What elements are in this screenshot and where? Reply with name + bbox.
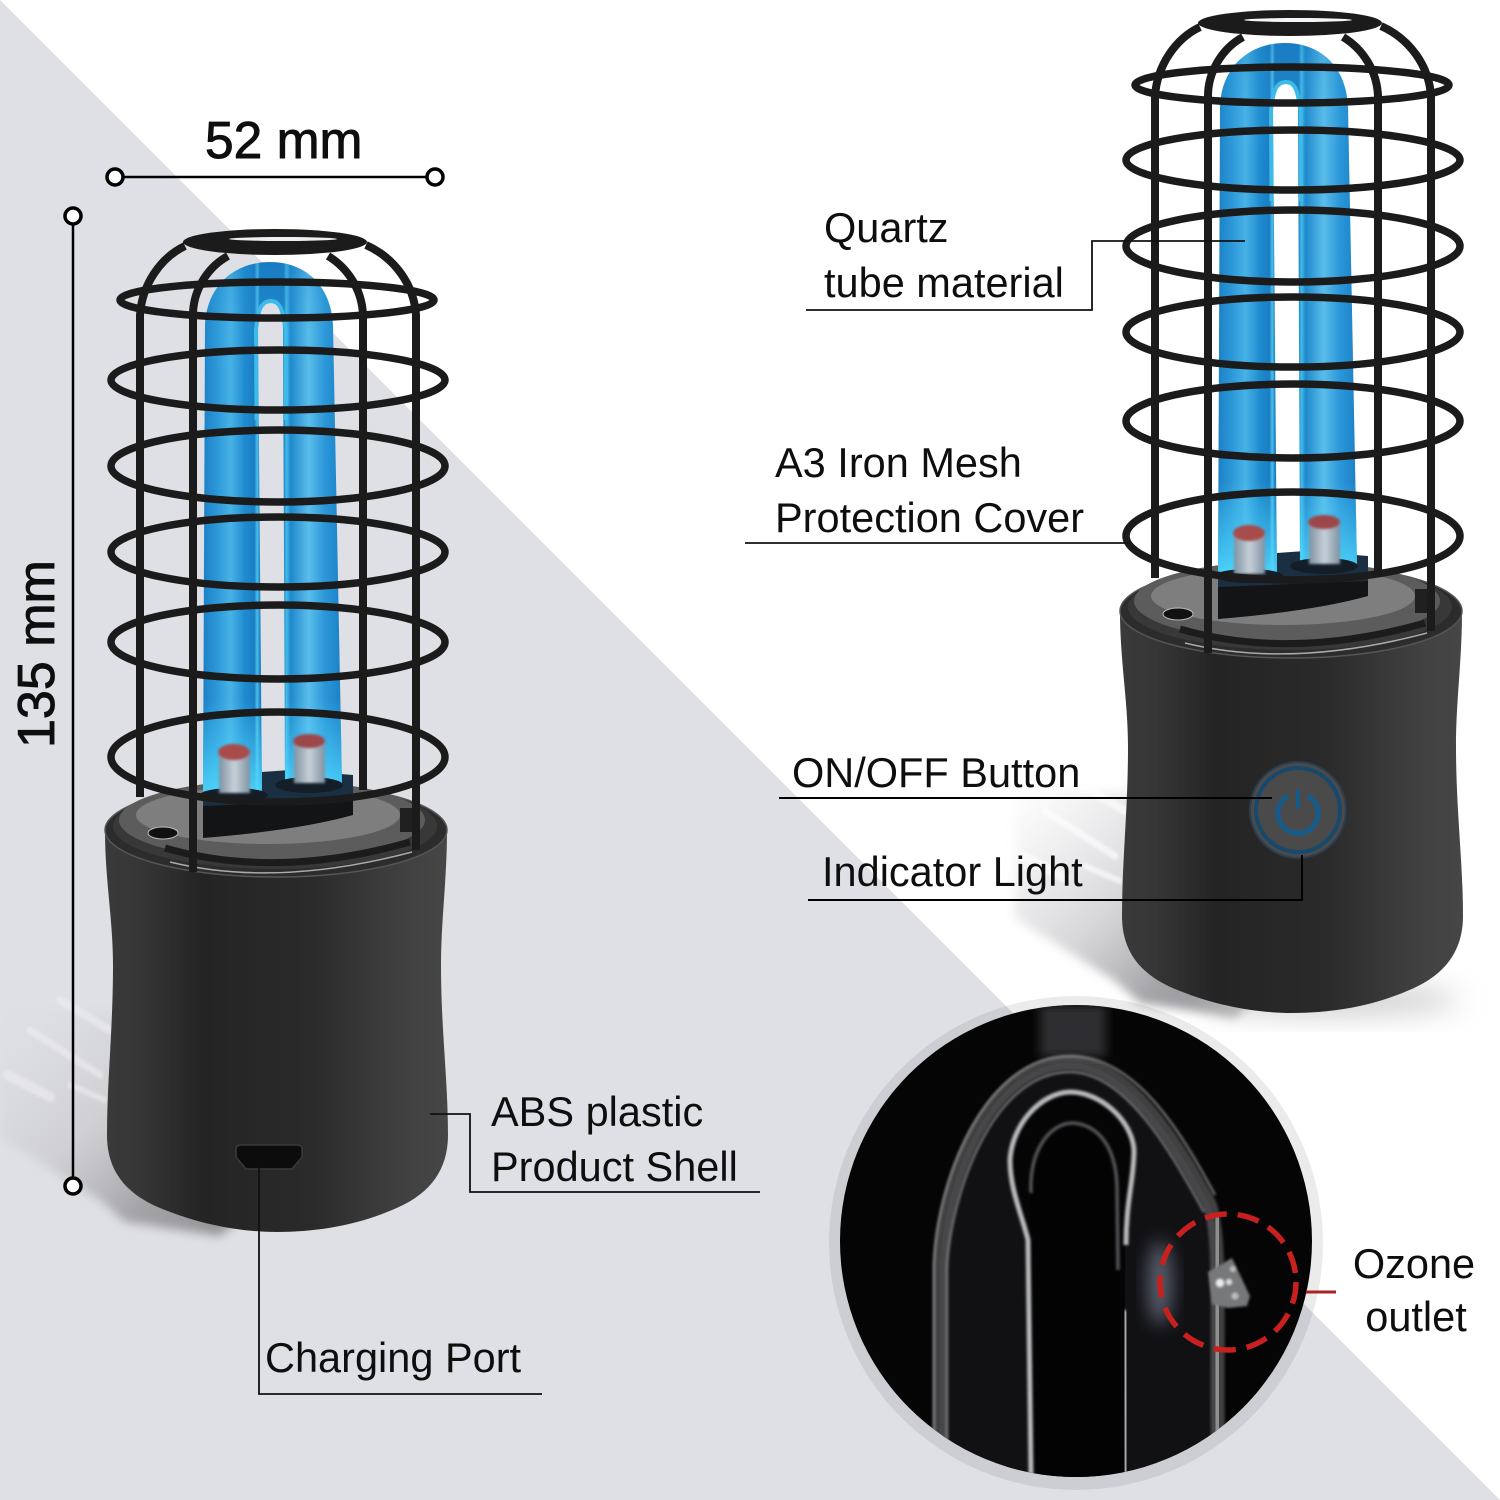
callout: on/off button: ON/OFF Button — [792, 749, 1080, 796]
right lamp top plate — [1120, 561, 1462, 658]
callout: ozone outlet — [1306, 1240, 1475, 1340]
right lamp cast shadow — [1015, 781, 1265, 1017]
lens black background — [840, 1005, 1312, 1477]
height dimension: 135 mm — [8, 208, 81, 1194]
callout: quartz tube material — [806, 204, 1245, 310]
right lamp: parts view — [1120, 10, 1463, 1013]
left lamp shell — [105, 830, 448, 1232]
left lamp top plate — [105, 780, 447, 877]
right lamp shell — [1120, 611, 1463, 1013]
red dashed highlight circle — [1160, 1214, 1296, 1350]
lens rim — [829, 996, 1323, 1490]
callout: charging port — [259, 1166, 542, 1394]
left lamp tube holder — [203, 770, 353, 838]
left lamp wire cage — [111, 229, 445, 872]
right lamp base shadow — [1200, 984, 1460, 1016]
right lamp blue U tube — [1215, 43, 1358, 583]
right lamp wire cage — [1126, 10, 1460, 653]
callout: charging port: Charging Port — [265, 1334, 522, 1381]
left lamp charging port — [236, 1145, 302, 1169]
callout: A3 iron mesh protection cover: A3 Iron Mesh — [775, 439, 1022, 486]
callout: ozone outlet: Ozone — [1353, 1240, 1475, 1287]
width dimension: 52 mm: 52 mm — [205, 111, 362, 169]
callout: A3 iron mesh protection cover: Protection Cover — [775, 494, 1084, 541]
callout: indicator light: Indicator Light — [822, 848, 1083, 895]
callout: ABS plastic product shell: ABS plastic — [491, 1088, 703, 1135]
callout: quartz tube material: Quartz — [824, 204, 949, 251]
height dimension: 135 mm: 135 mm — [8, 560, 66, 748]
left lamp blue U tube — [200, 262, 343, 802]
icon: power button — [1250, 762, 1346, 858]
callout: indicator light — [808, 848, 1302, 900]
callout: A3 iron mesh protection cover — [745, 439, 1130, 543]
left lamp: front view with dimensions — [105, 229, 448, 1232]
ozone outlet nub — [1208, 1258, 1250, 1308]
right lamp tube holder — [1218, 551, 1368, 619]
callout: ozone outlet: outlet — [1365, 1293, 1467, 1340]
close-up of glass tube — [934, 1005, 1250, 1480]
left lamp cast shadow — [0, 1000, 250, 1236]
width dimension: 52 mm — [107, 111, 443, 185]
callout: ABS plastic product shell: Product Shell — [491, 1143, 738, 1190]
magnified lens: quartz tube close-up — [829, 996, 1323, 1490]
callout: quartz tube material: tube material — [824, 259, 1064, 306]
callout: ABS plastic product shell — [430, 1088, 760, 1192]
